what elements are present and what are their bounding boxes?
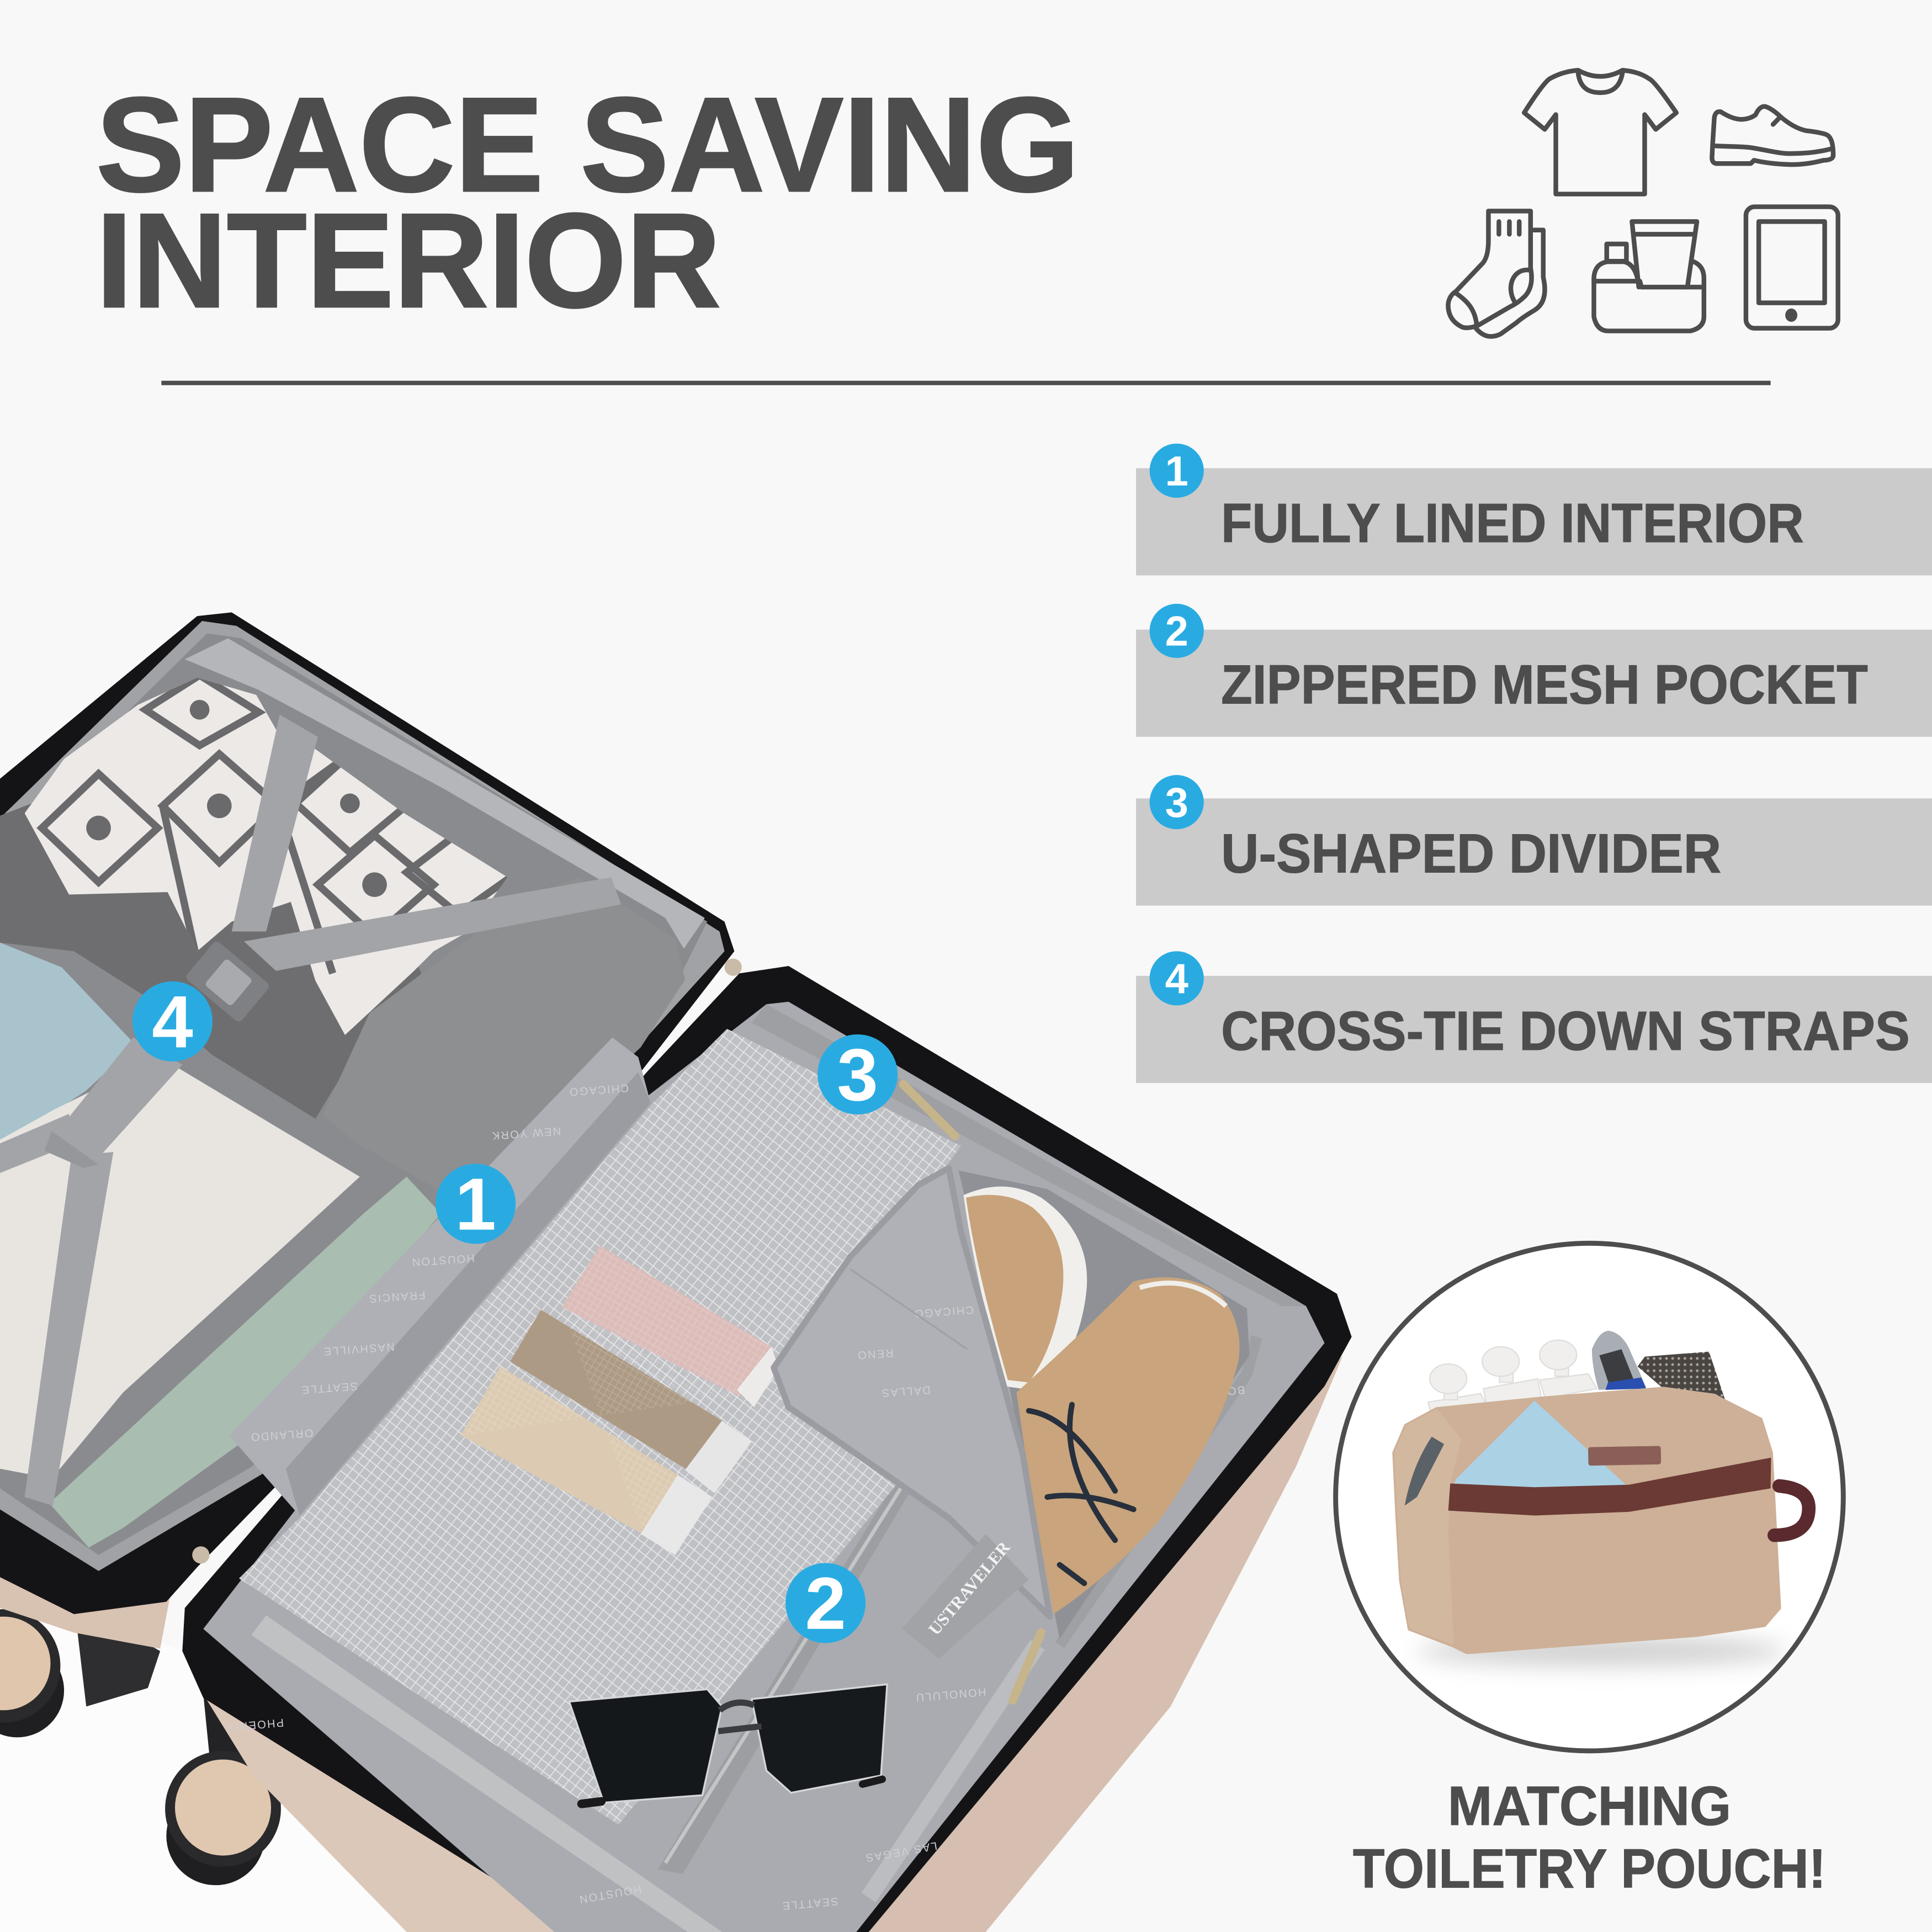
sunglasses	[569, 1684, 887, 1804]
marker 4: 4	[152, 981, 193, 1063]
marker 1	[436, 1164, 516, 1246]
pouch callout	[1336, 1243, 1843, 1751]
brand tag	[902, 1534, 1029, 1658]
numbered markers on suitcase	[132, 981, 898, 1645]
feature bar 2: ZIPPERED MESH POCKET	[1221, 654, 1868, 716]
feature bar 2: 2	[1165, 608, 1188, 655]
lower shell	[0, 1355, 1343, 1932]
lining city names: HOUSTON	[577, 1882, 643, 1906]
marker 2: 2	[805, 1563, 846, 1645]
icon: toiletries	[1594, 221, 1704, 331]
U-shaped divider flap: DALLAS	[880, 1383, 931, 1399]
base zip bands	[251, 1004, 1306, 1932]
feature bar 1: 1	[1165, 448, 1188, 495]
feature bar 1	[1136, 444, 1932, 575]
lid lining	[0, 621, 724, 1571]
shoes behind the divider	[959, 1171, 1249, 1639]
marker 2	[785, 1563, 866, 1645]
blue packet	[1454, 1400, 1626, 1488]
marker 3: 3	[837, 1034, 878, 1116]
deodorant	[1592, 1331, 1646, 1390]
circle frame	[1336, 1243, 1843, 1751]
base lining	[203, 1002, 1325, 1932]
lining city names: BOSTON	[1191, 1383, 1245, 1400]
packed wool sweater	[0, 675, 518, 1119]
icon: socks	[1448, 211, 1544, 337]
pouch caption: MATCHING	[1448, 1775, 1731, 1837]
wheels	[0, 1602, 296, 1885]
title: SPACE SAVING	[96, 70, 1079, 220]
feature bar 4	[1136, 951, 1932, 1083]
hinge rivets	[192, 959, 742, 1564]
lining city names	[225, 1383, 1245, 1912]
lining city names: LAS VEGAS	[864, 1839, 938, 1864]
rolled toiletries behind mesh	[461, 1246, 779, 1555]
feature bar 3: 3	[1165, 779, 1188, 826]
side flap of fully lined interior: NASHVILLE	[322, 1340, 395, 1357]
U-shaped divider flap: CHICAGO	[913, 1303, 974, 1320]
tissue pack	[1638, 1352, 1726, 1401]
zipper pulls	[903, 1084, 1041, 1700]
packing icons	[1448, 70, 1838, 337]
gray knit roll	[323, 877, 685, 1193]
lining city names: PHOENIX	[225, 1716, 284, 1733]
strap buckle	[184, 940, 271, 1023]
side handle	[1774, 1486, 1809, 1535]
side flap of fully lined interior: ORLANDO	[250, 1426, 314, 1443]
mesh pocket	[239, 1029, 961, 1825]
marker 1: 1	[455, 1164, 496, 1246]
side flap of fully lined interior: SEATTLE	[300, 1379, 358, 1396]
U-shaped divider flap: RENO	[856, 1346, 894, 1361]
marker 3	[818, 1034, 898, 1116]
lid shell	[0, 612, 734, 1614]
icon: t-shirt	[1524, 70, 1676, 194]
feature bar 2	[1136, 604, 1932, 737]
feature list	[1136, 444, 1932, 1083]
side flap of fully lined interior: CHICAGO	[568, 1081, 629, 1098]
logo patch	[1588, 1446, 1661, 1466]
open zipper gap	[1405, 1437, 1444, 1506]
pouch caption: TOILETRY POUCH!	[1353, 1838, 1826, 1900]
U-shaped divider flap	[774, 1168, 1050, 1617]
floor	[0, 1589, 591, 1932]
blue fabric	[0, 943, 136, 1148]
white sweater	[0, 1057, 360, 1479]
title	[96, 70, 1079, 336]
side flap of fully lined interior: FRANCIS	[368, 1288, 426, 1304]
icon: tablet	[1746, 207, 1838, 328]
icon: shoe	[1712, 107, 1833, 164]
title: INTERIOR	[96, 185, 721, 336]
marker 4	[132, 981, 213, 1063]
lining city names: CHICAGO	[1122, 1463, 1183, 1481]
pouch caption	[1353, 1775, 1826, 1900]
tie-down straps	[0, 715, 621, 1506]
feature bar 1: FULLY LINED INTERIOR	[1221, 492, 1804, 554]
lining city names: HONOLULU	[914, 1685, 986, 1703]
side flap of fully lined interior: NEW YORK	[491, 1124, 561, 1142]
feature bar 4: CROSS-TIE DOWN STRAPS	[1221, 1000, 1910, 1062]
brand tag: USTRAVELER	[925, 1537, 1014, 1639]
bottles	[1427, 1339, 1597, 1411]
pouch shadow	[1417, 1636, 1787, 1666]
feature bar 3: U-SHAPED DIVIDER	[1221, 822, 1721, 884]
lining city names: SEATTLE	[781, 1895, 838, 1912]
open suitcase photo	[0, 612, 1352, 1932]
base shell	[182, 966, 1352, 1932]
feature bar 3	[1136, 775, 1932, 906]
side flap of fully lined interior	[229, 1037, 651, 1516]
divider line	[161, 381, 1771, 385]
feature bar 4: 4	[1165, 956, 1188, 1002]
pouch side panel	[1394, 1409, 1461, 1645]
green fabric	[49, 1177, 441, 1548]
brown leather band	[1448, 1458, 1771, 1516]
toiletry pouch illustration	[1394, 1331, 1809, 1666]
side flap of fully lined interior: HOUSTON	[411, 1251, 475, 1268]
pouch body	[1394, 1389, 1779, 1652]
